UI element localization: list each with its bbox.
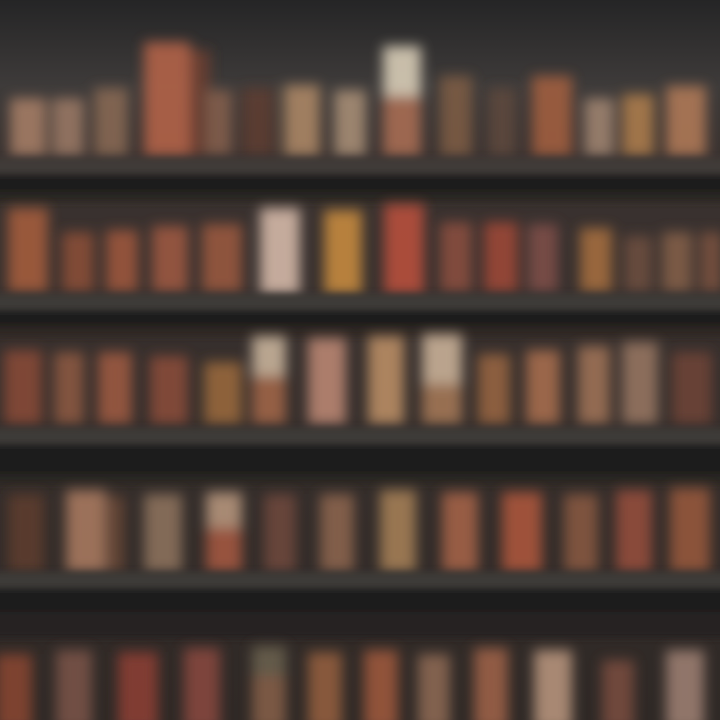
row 2 jars (8, 204, 720, 294)
shelf 1 (0, 158, 720, 202)
shelf 3 (0, 428, 720, 484)
shelf 4 (0, 572, 720, 638)
row 5 jars (0, 646, 704, 720)
row 4 jars (8, 488, 710, 572)
row 1 jars (10, 42, 706, 156)
row 3 jars (4, 334, 712, 424)
shelf 2 (0, 294, 720, 336)
